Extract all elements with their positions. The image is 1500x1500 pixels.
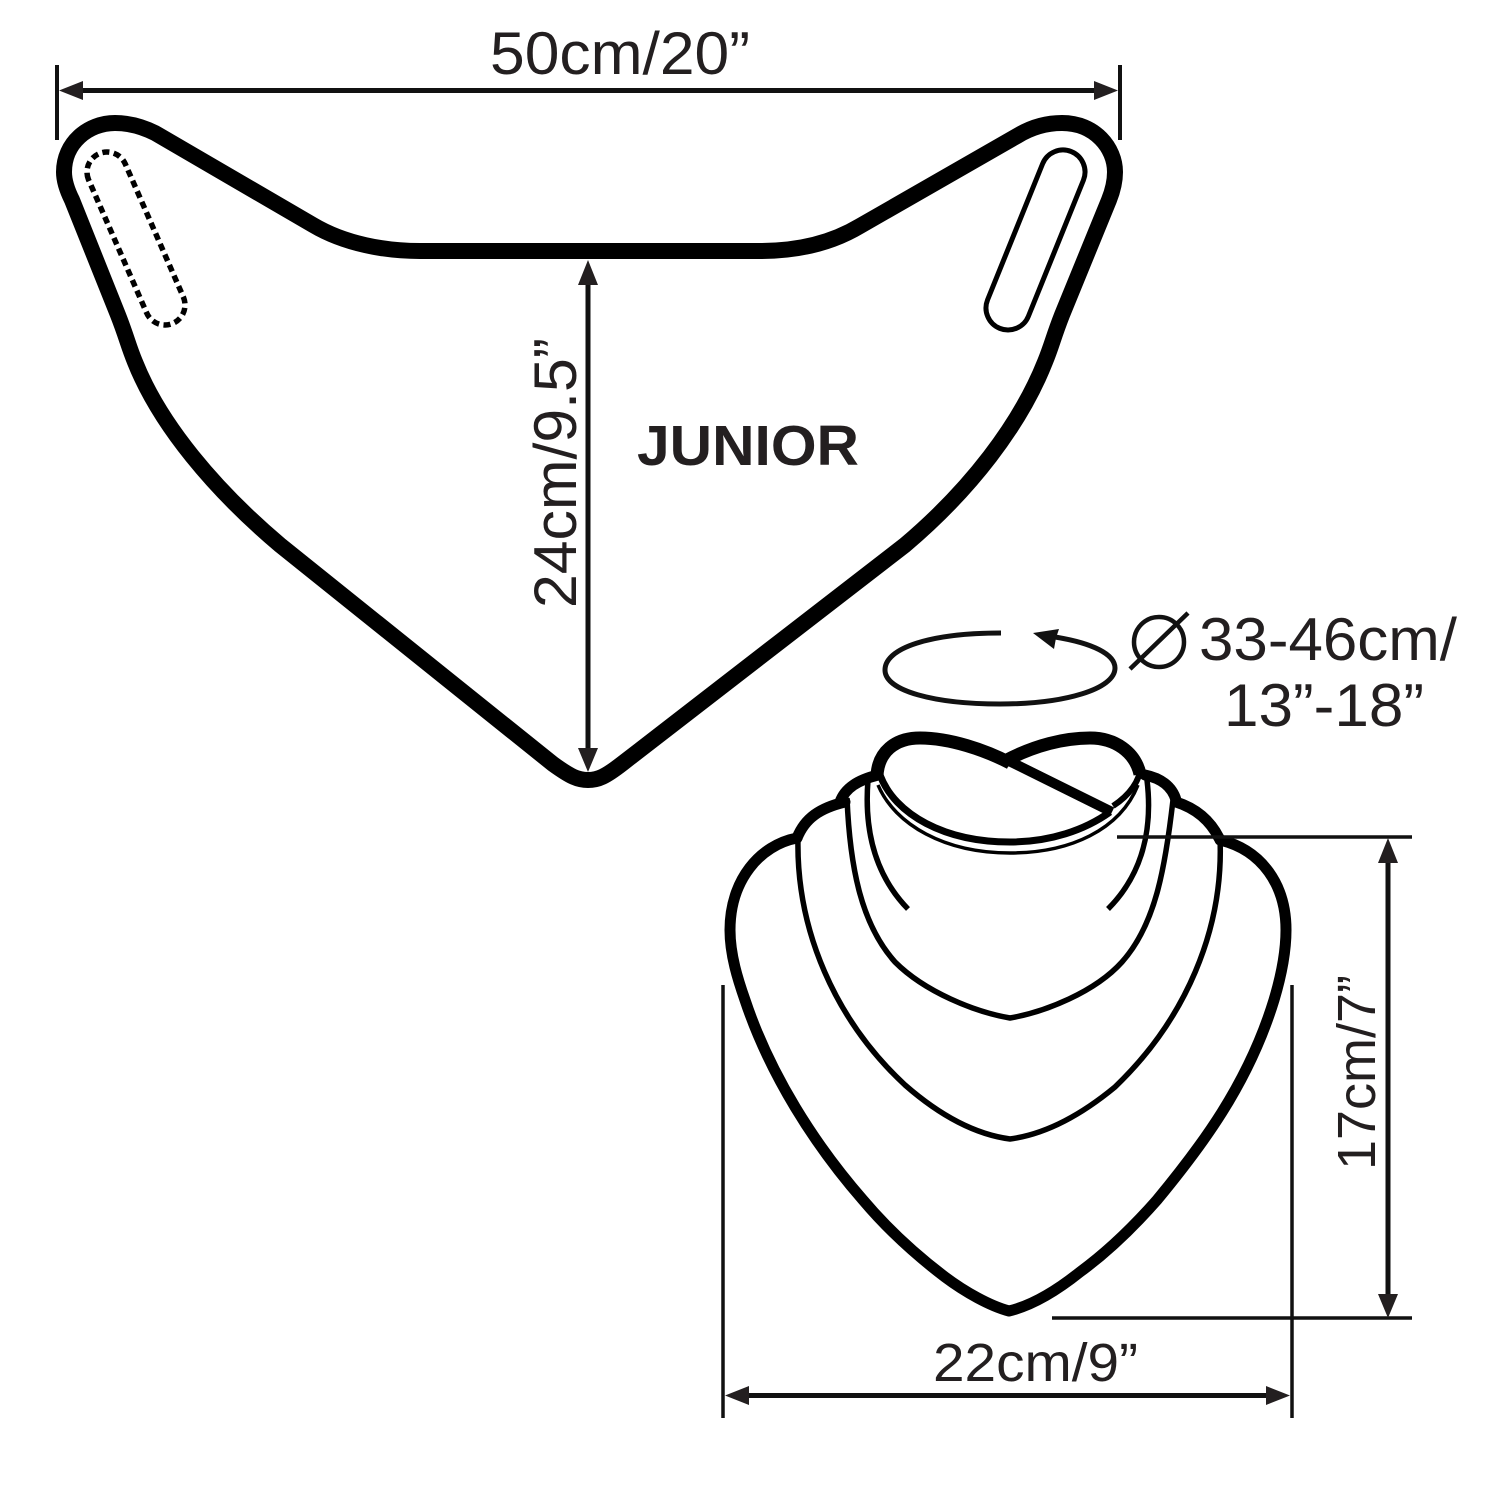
neck circumference icon bbox=[885, 613, 1188, 704]
collar left loop bbox=[877, 738, 1010, 776]
width dimension: 50cm/20in: 50cm/20” bbox=[490, 20, 750, 87]
height dimension: 17cm/7in bbox=[1052, 837, 1412, 1318]
collar right loop bbox=[1005, 738, 1140, 774]
neck inner lines bbox=[867, 780, 1149, 909]
panel: worn bandana illustration bbox=[730, 738, 1286, 1311]
height dimension: 24cm/9.5in: 24cm/9.5” bbox=[522, 338, 589, 608]
icon: solid right fastening strip bbox=[986, 150, 1085, 330]
outer bandana outline bbox=[730, 838, 1286, 1311]
height dimension: 24cm/9.5in bbox=[522, 260, 598, 772]
collar under rim bbox=[878, 785, 1138, 853]
shoulder folds bbox=[797, 775, 1219, 838]
panel: flat bandana outline bbox=[64, 123, 1115, 780]
label: JUNIOR: JUNIOR bbox=[637, 414, 859, 478]
width dimension: 50cm/20in bbox=[57, 20, 1120, 140]
neck size text bbox=[1199, 606, 1457, 739]
icon: dashed left fastening strip bbox=[87, 152, 185, 325]
collar lower rim bbox=[880, 775, 1110, 842]
inner fold bbox=[847, 798, 1173, 1018]
outer fold bbox=[798, 838, 1220, 1139]
collar diagonal overlap bbox=[1007, 760, 1112, 812]
neck size text: 13”-18” bbox=[1224, 672, 1424, 739]
height dimension: 17cm/7in: 17cm/7” bbox=[1327, 975, 1387, 1170]
width dimension: 22cm/9in bbox=[723, 985, 1292, 1418]
width dimension: 22cm/9in: 22cm/9” bbox=[933, 1333, 1138, 1393]
collar right return bbox=[1113, 768, 1140, 806]
neck size text: 33-46cm/ bbox=[1199, 606, 1457, 673]
